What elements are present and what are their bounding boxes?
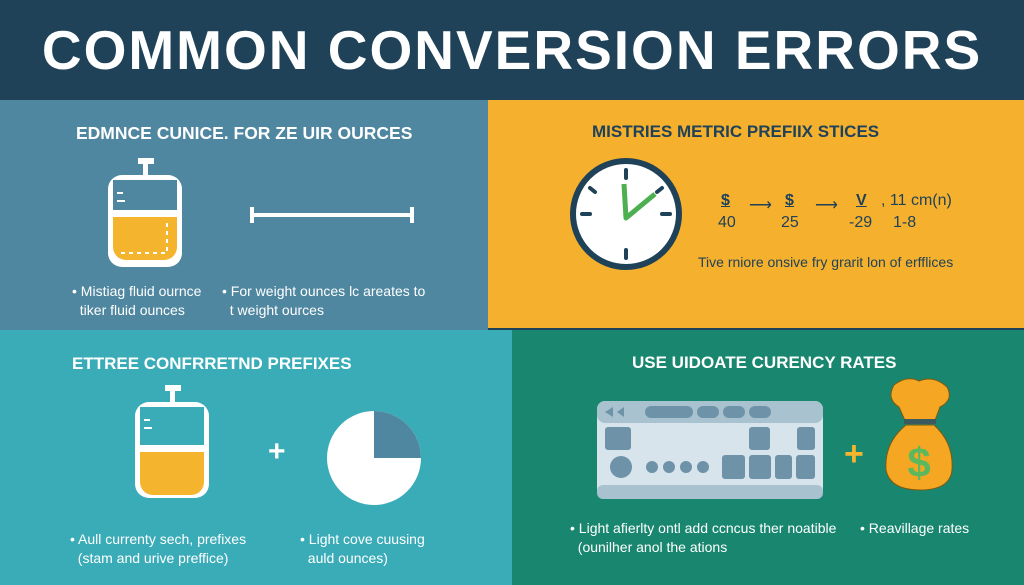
text: formula: , 11 cm(n) [881,192,952,209]
text: formula: V [856,192,867,209]
icon: ruler line [250,207,414,223]
text: formula: ⟶ [815,197,838,214]
text: bullet 1: • Mistiag fluid ournce [72,283,201,299]
heading: MISTRIES METRIC PREFIIX STICES [592,122,879,141]
icon: jar [108,158,182,267]
text: bullet 2: auld ounces) [308,550,388,566]
text: formula: $ [721,192,730,209]
text: formula: -29 [849,214,872,231]
icon: keyboard [597,401,823,499]
icon: clock [570,158,682,270]
text: formula: 1-8 [893,214,916,231]
icon: money bag: $ [907,439,931,486]
text: bullet 2 [222,283,425,318]
icon: plus: + [268,435,286,468]
text: bullet 2: • Light cove cuusing [300,531,425,547]
text: bullet 1: (ounilher anol the ations [578,539,727,555]
panel: prefixes [0,330,512,585]
text: bullet 2: t weight ources [230,302,324,318]
text: bullet 1: tiker fluid ounces [80,302,185,318]
heading: EDMNCE CUNICE. FOR ZE UIR OURCES [76,123,412,143]
panel: currency [512,330,1024,585]
text: formula: $ [785,192,794,209]
text: bullet 1: • Aull currenty sech, prefixes [70,531,246,547]
heading: ETTREE CONFRRETND PREFIXES [72,354,352,373]
text: bullet 1: (stam and urive preffice) [78,550,228,566]
text: formula: 40 [718,214,736,231]
text: bullet 2: • Reavillage rates [860,520,969,536]
title: COMMON CONVERSION ERRORS [42,19,982,81]
text: formula [718,192,952,231]
text: bullet 1: • Light afierlty ontl add ccncus ther noatible [570,520,836,536]
text: bullet 1 [570,520,836,555]
text: caption: Tive rniore onsive fry grarit lon of erfflices [698,254,953,270]
text: formula: ⟶ [749,197,772,214]
icon: jar [135,385,209,498]
text: bullet 2: • For weight ounces lc areates to [222,283,425,299]
heading: USE UIDOATE CURENCY RATES [632,353,896,372]
text: bullet 1 [70,531,246,566]
icon: money bag [885,378,953,490]
panel: metric prefix [488,100,1024,328]
panel: fluid ounces [0,100,488,330]
title bar [0,0,1024,100]
text: bullet 1 [72,283,201,318]
text: bullet 2 [300,531,425,566]
icon: plus: + [844,435,864,473]
icon: pie chart [327,411,421,505]
text: formula: 25 [781,214,799,231]
